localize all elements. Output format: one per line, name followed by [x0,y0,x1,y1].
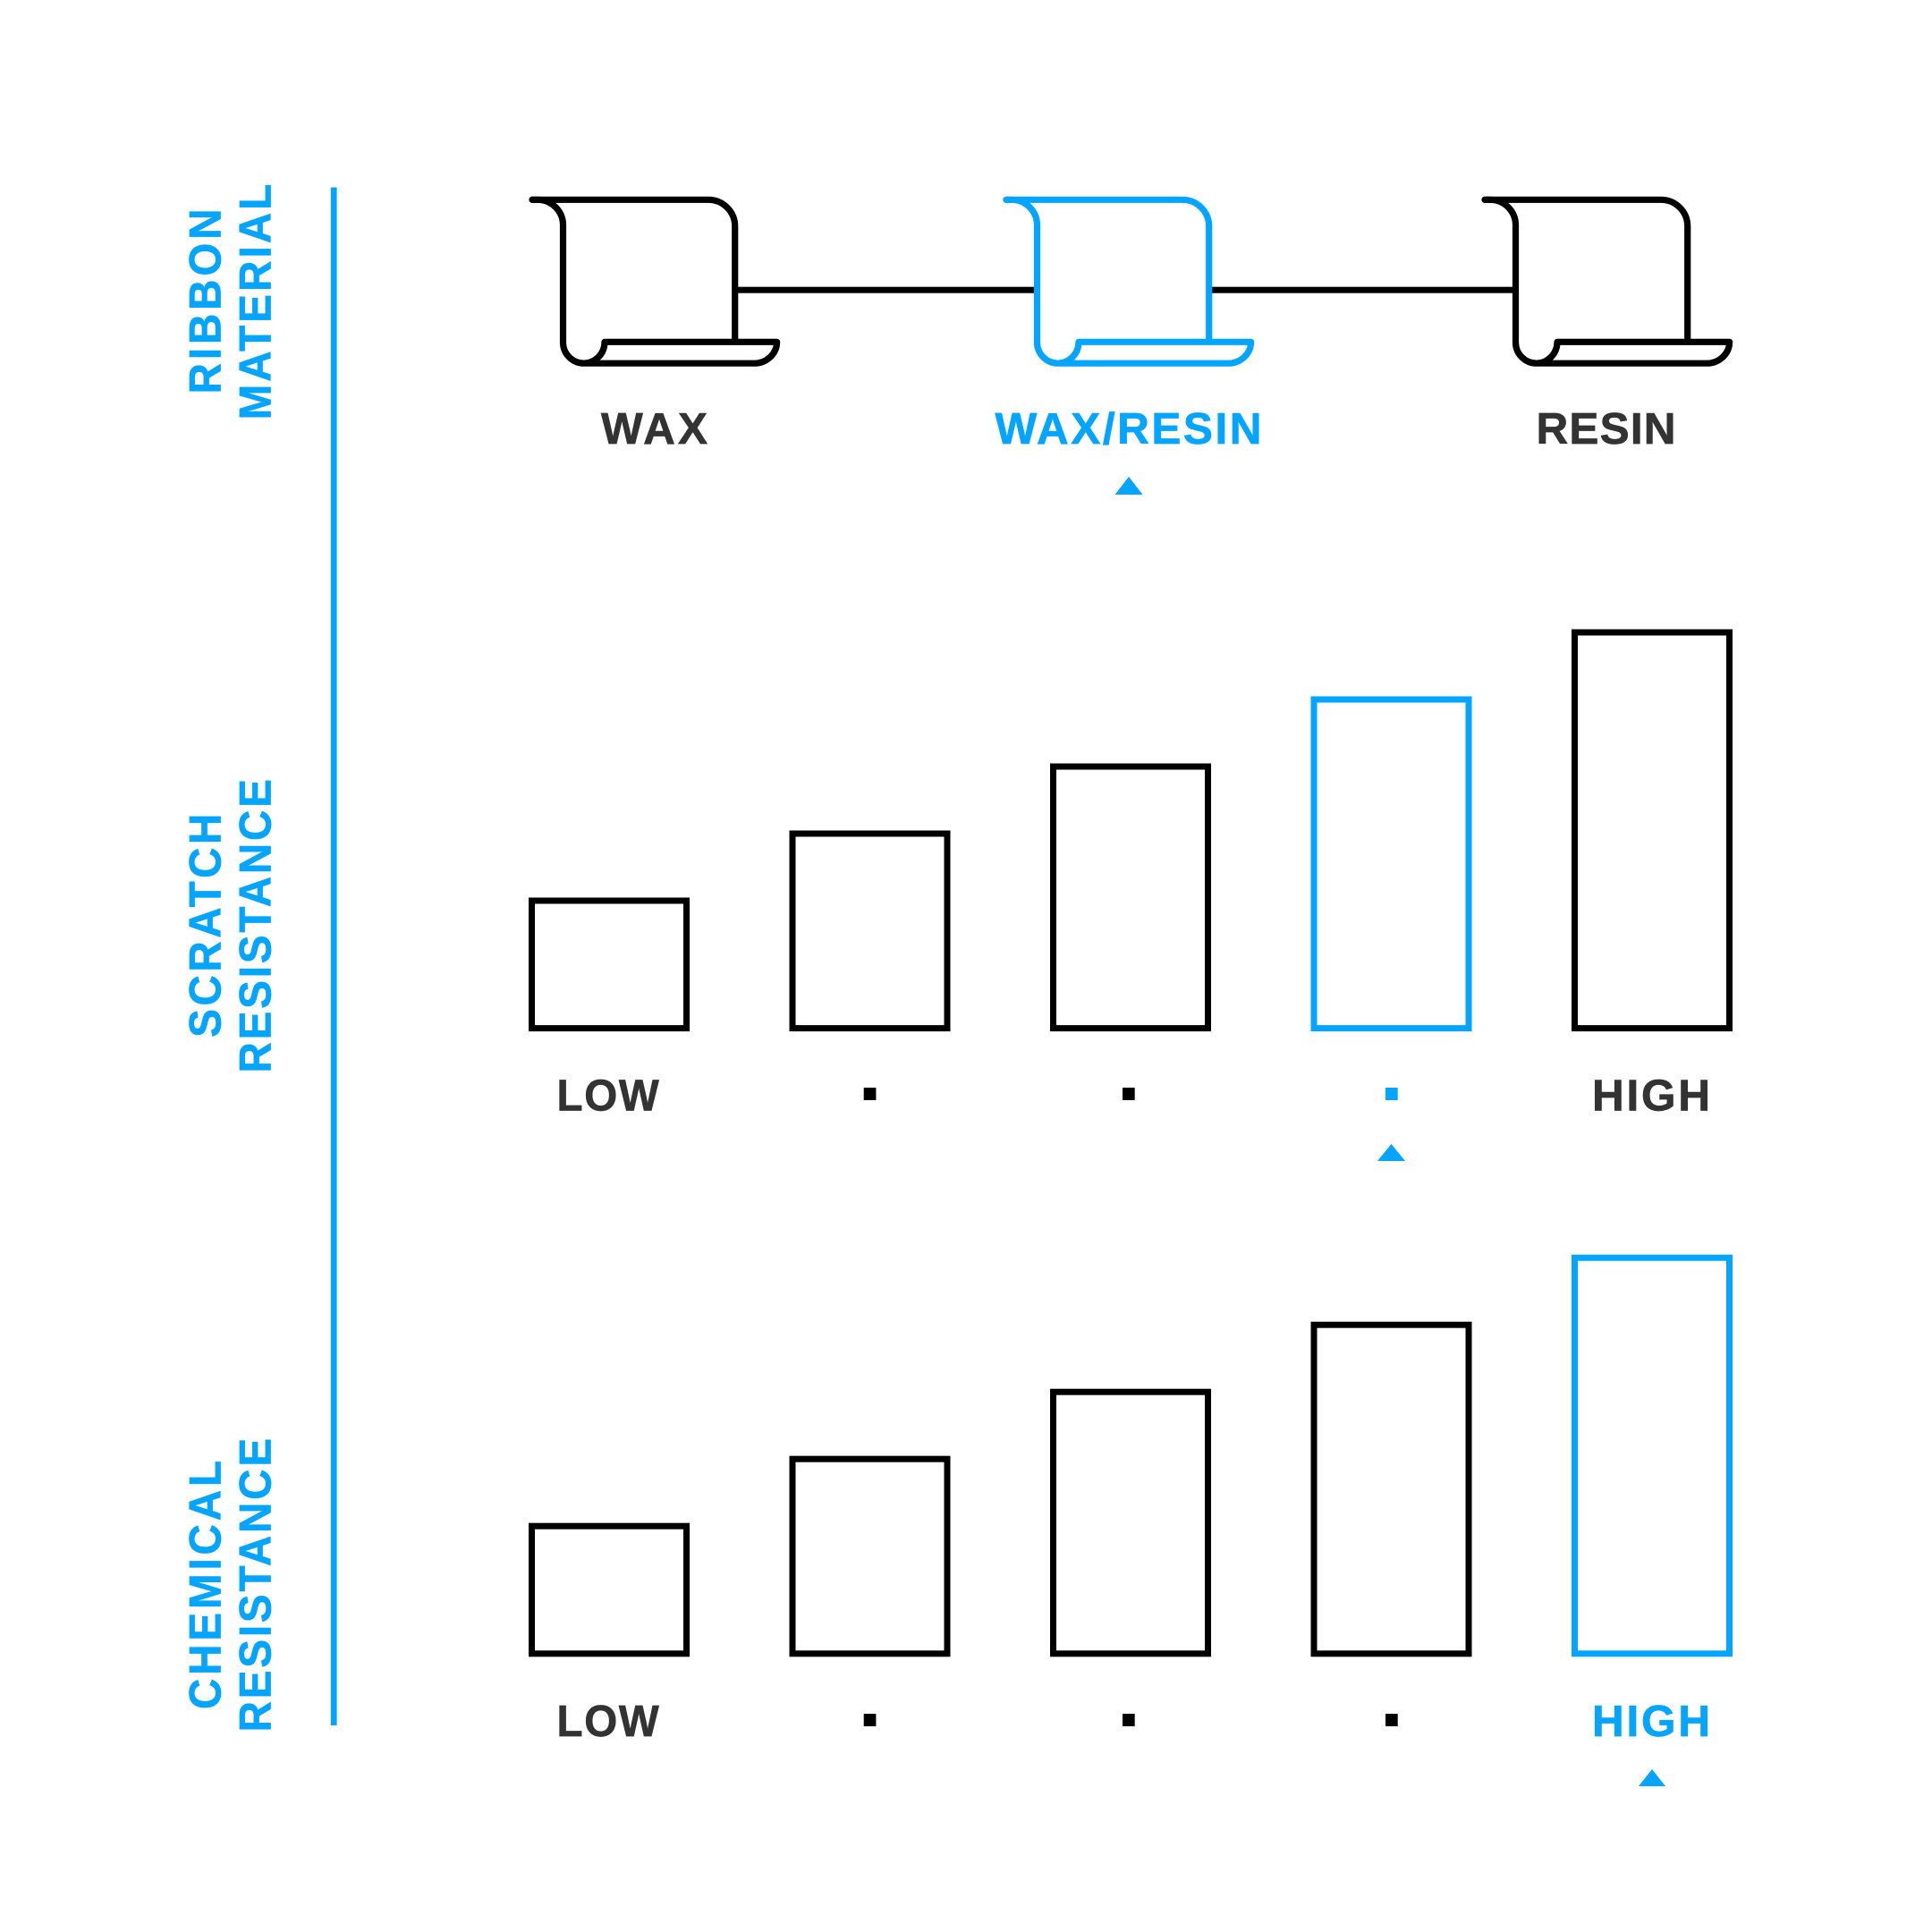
connector line: wax/resin to resin [1208,287,1515,293]
heading: scratch resistance [181,779,281,1073]
bar 2 [792,834,947,1029]
bar 5 [1574,632,1730,1029]
heading: scratch resistance: SCRATCH [181,814,231,1038]
bar 1 [531,1526,687,1654]
heading: scratch resistance: RESISTANCE [231,779,281,1073]
bar 5, highlighted [1574,1258,1730,1654]
bar 3 [1054,767,1208,1029]
heading: ribbon material: MATERIAL [231,184,281,419]
label: high: HIGH [1592,1697,1710,1746]
bar 3 [1054,1392,1208,1654]
marker: triangle under wax/resin [1114,477,1143,495]
heading: chemical resistance: RESISTANCE [231,1438,281,1732]
label: wax/resin: WAX/RESIN [995,404,1261,453]
panel: ribbon material scale [532,199,1730,495]
tick 3 [1123,1088,1135,1100]
label: low: LOW [556,1072,659,1121]
heading: ribbon material: RIBBON [181,208,231,394]
bar 4 [1314,1325,1469,1654]
label: low: LOW [556,1697,659,1746]
icon: resin ribbon scroll [1485,199,1730,363]
marker: triangle under high [1639,1769,1665,1786]
tick 3 [1123,1714,1135,1726]
tick 4, highlighted [1385,1088,1398,1100]
bar 2 [792,1459,947,1654]
marker: triangle under tick 4 [1377,1144,1405,1161]
heading: chemical resistance: CHEMICAL [181,1461,231,1709]
heading: chemical resistance [181,1438,281,1732]
bar 1 [531,901,687,1029]
heading: ribbon material [181,184,281,419]
panel: chemical resistance bar chart [531,1258,1730,1786]
panel: scratch resistance bar chart [531,632,1730,1161]
connector line: wax to wax/resin [734,287,1037,293]
label: high: HIGH [1592,1072,1710,1121]
icon: wax ribbon scroll [532,199,777,363]
tick 4 [1385,1714,1398,1726]
tick 2 [864,1714,876,1726]
label: wax: WAX [601,404,708,453]
icon: wax/resin ribbon scroll [1006,199,1251,363]
bar 4, highlighted [1314,699,1469,1029]
tick 2 [864,1088,876,1100]
label: resin: RESIN [1537,404,1676,453]
vertical divider line [331,188,337,1725]
